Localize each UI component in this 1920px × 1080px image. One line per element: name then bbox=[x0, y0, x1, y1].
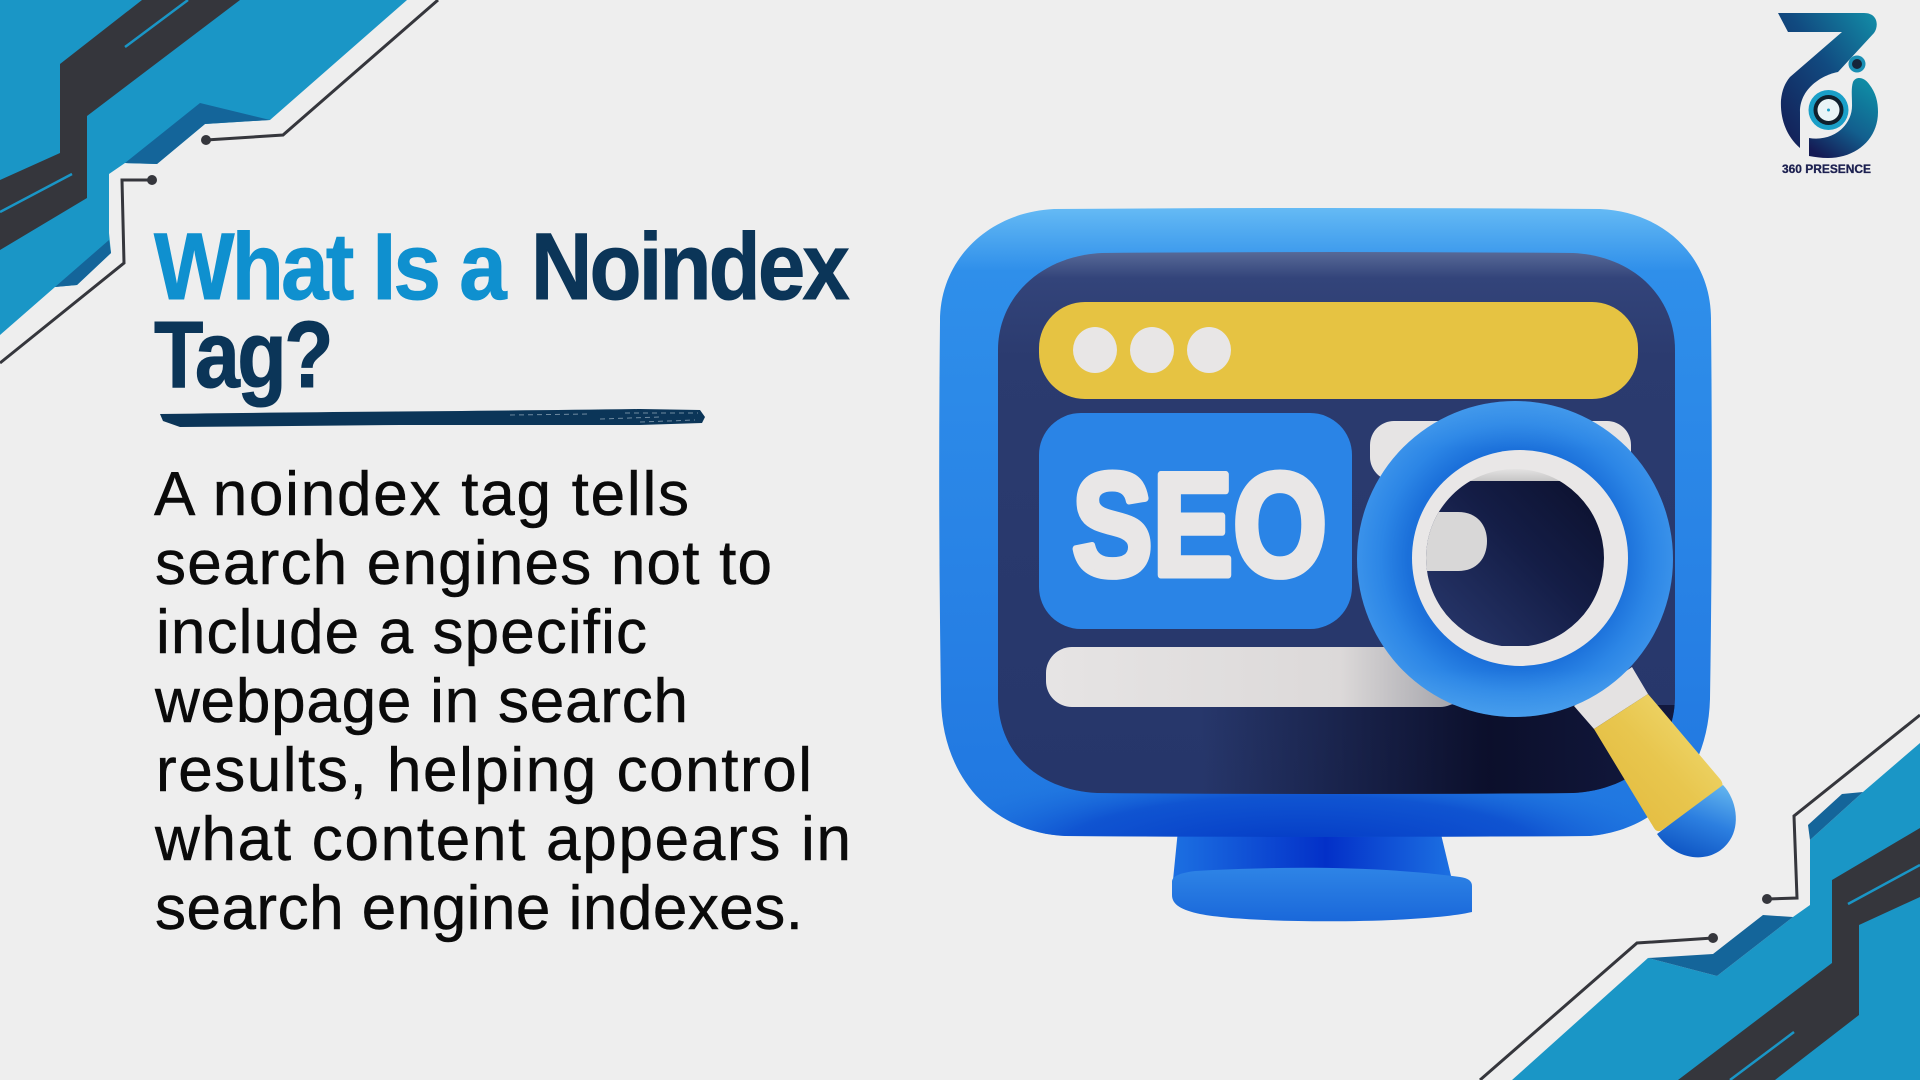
logo mark: bowl bbox=[1809, 78, 1878, 158]
bottom content bar bbox=[1046, 647, 1466, 707]
top-left corner decoration bbox=[0, 0, 438, 363]
logo: 360 Presence bbox=[1778, 13, 1878, 176]
top right content bar bbox=[1370, 421, 1631, 481]
magnifier glass reflection of top bar bbox=[1470, 470, 1560, 481]
title line 1: navy word: Noindex bbox=[531, 214, 850, 320]
logo small lens bbox=[1848, 56, 1866, 72]
body paragraph: webpage in search bbox=[154, 667, 688, 736]
address bar bbox=[1039, 302, 1638, 399]
title line 1: blue words: What Is a bbox=[154, 214, 508, 320]
body paragraph: results, helping control bbox=[156, 736, 812, 805]
magnifier inner rim bbox=[1412, 450, 1628, 666]
monitor stand base bbox=[1172, 868, 1472, 921]
SEO text: SEO bbox=[1072, 443, 1327, 606]
brush underline bbox=[160, 409, 705, 427]
body paragraph: search engine indexes. bbox=[155, 874, 803, 943]
magnifier cap bbox=[1657, 785, 1736, 857]
body paragraph bbox=[154, 460, 851, 943]
magnified content bar bbox=[1426, 512, 1487, 571]
body paragraph: search engines not to bbox=[155, 529, 772, 598]
monitor stand neck bbox=[1172, 830, 1452, 890]
monitor screen bbox=[990, 245, 1685, 800]
title bbox=[154, 214, 850, 408]
logo mark: stylised 7 and p bbox=[1778, 13, 1877, 148]
SEO tile bbox=[1039, 413, 1352, 629]
monitor outer frame bbox=[939, 208, 1712, 837]
window dots bbox=[1073, 327, 1231, 373]
magnifier handle collar bbox=[1574, 667, 1648, 729]
logo lens bbox=[1808, 90, 1848, 130]
magnifier ring bbox=[1357, 401, 1673, 717]
magnifier handle bbox=[1594, 694, 1722, 831]
illustration: SEO monitor with magnifier bbox=[900, 200, 1736, 940]
logo wordmark: 360 PRESENCE bbox=[1782, 162, 1871, 176]
magnifier glass bbox=[1426, 469, 1604, 647]
body paragraph: A noindex tag tells bbox=[154, 460, 689, 529]
body paragraph: include a specific bbox=[156, 598, 647, 667]
bottom-right corner decoration bbox=[1480, 715, 1920, 1080]
title line 2: Tag? bbox=[154, 302, 331, 408]
body paragraph: what content appears in bbox=[154, 805, 851, 874]
